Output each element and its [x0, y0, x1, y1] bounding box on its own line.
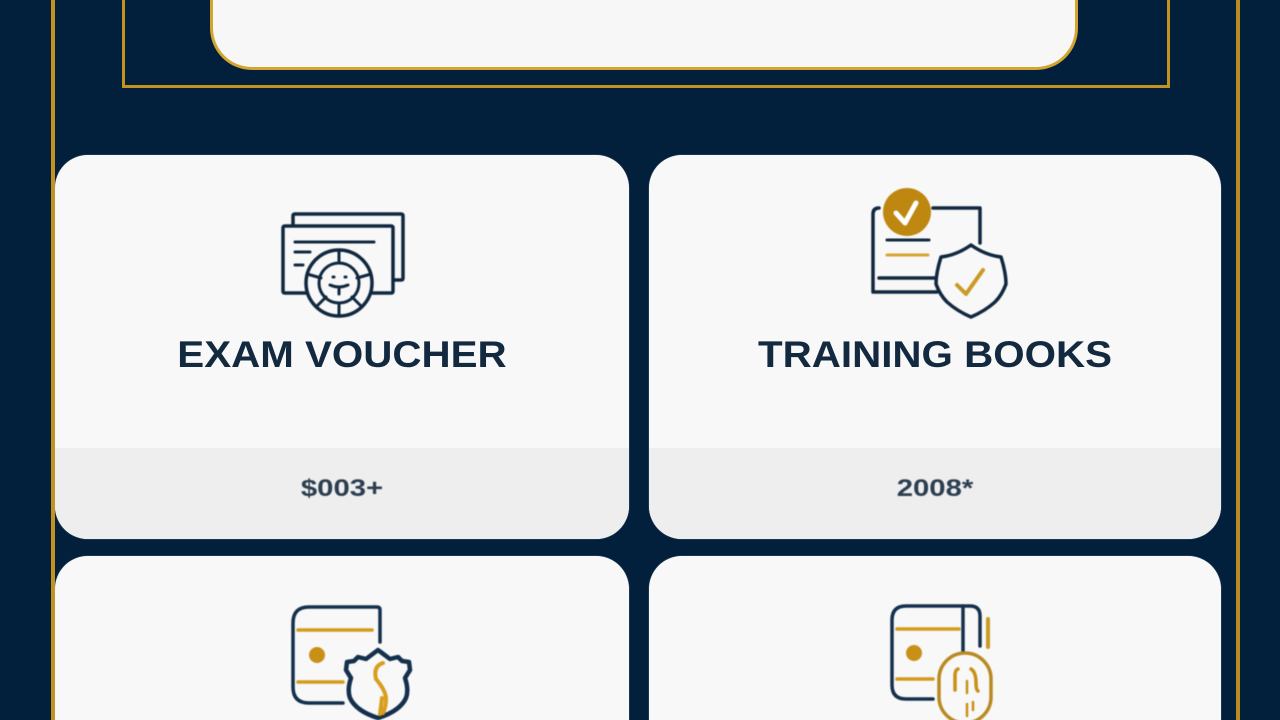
inner gold frame of header [122, 0, 1170, 88]
icon: exam voucher [280, 211, 406, 319]
panel: training books [649, 155, 1221, 539]
icon: shield with dollar [290, 604, 413, 720]
panel: lower left card [55, 556, 629, 720]
price: training books: 2008* [897, 475, 973, 502]
heading: exam voucher: EXAM VOUCHER [177, 334, 507, 375]
price band [55, 448, 629, 539]
price band [649, 448, 1221, 539]
panel: exam voucher [55, 155, 629, 539]
icon: book with badge [889, 603, 994, 720]
heading: training books: TRAINING BOOKS [758, 334, 1112, 375]
header panel [210, 0, 1078, 70]
icon: training books [870, 187, 1009, 320]
panel: lower right card [649, 556, 1221, 720]
price: exam voucher: $003+ [301, 475, 383, 502]
